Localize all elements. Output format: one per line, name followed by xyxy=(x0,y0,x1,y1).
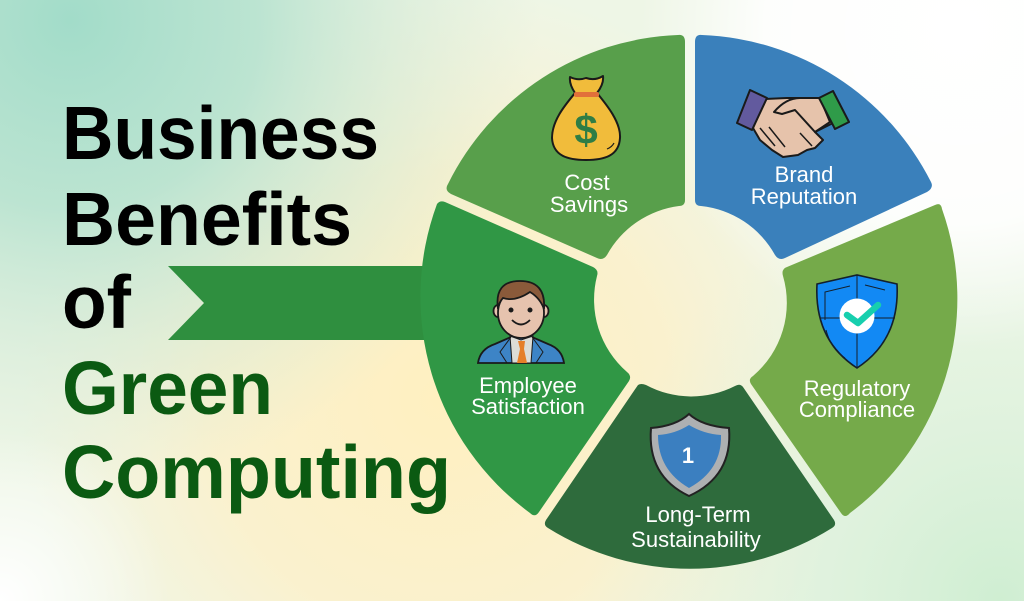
label: brand reputation: Reputation xyxy=(751,184,857,209)
title xyxy=(62,91,451,514)
title line: Benefits: Benefits xyxy=(62,177,352,261)
label: cost savings: Savings xyxy=(550,192,628,217)
title line: of: of xyxy=(62,260,132,344)
label: long-term sustainability: Long-Term xyxy=(645,502,751,527)
icon: badge shield: 1 xyxy=(682,443,694,468)
label: brand reputation: Brand xyxy=(775,162,833,187)
label: employee satisfaction: Satisfaction xyxy=(471,394,585,419)
title line: Business: Business xyxy=(62,91,379,175)
label: employee satisfaction: Employee xyxy=(479,373,577,398)
label: long-term sustainability: Sustainability xyxy=(631,527,761,552)
segment: cost savings xyxy=(447,35,685,259)
icon: shield check xyxy=(817,275,897,368)
segment: regulatory compliance xyxy=(750,204,957,516)
segment: employee satisfaction xyxy=(420,201,630,515)
icon: businessman xyxy=(478,281,564,363)
label: regulatory compliance: Compliance xyxy=(799,397,915,422)
label: regulatory compliance: Regulatory xyxy=(804,376,910,401)
icon: badge shield xyxy=(651,414,729,496)
icon: money bag xyxy=(552,76,620,160)
segment: long-term sustainability xyxy=(545,384,835,569)
icon: dollar sign: $ xyxy=(574,106,598,153)
label: cost savings: Cost xyxy=(564,170,610,195)
ribbon arrow xyxy=(168,266,440,340)
segment: brand reputation xyxy=(695,35,932,259)
title line: Computing: Computing xyxy=(62,430,451,514)
icon: handshake xyxy=(737,90,849,157)
title line: Green: Green xyxy=(62,346,273,430)
